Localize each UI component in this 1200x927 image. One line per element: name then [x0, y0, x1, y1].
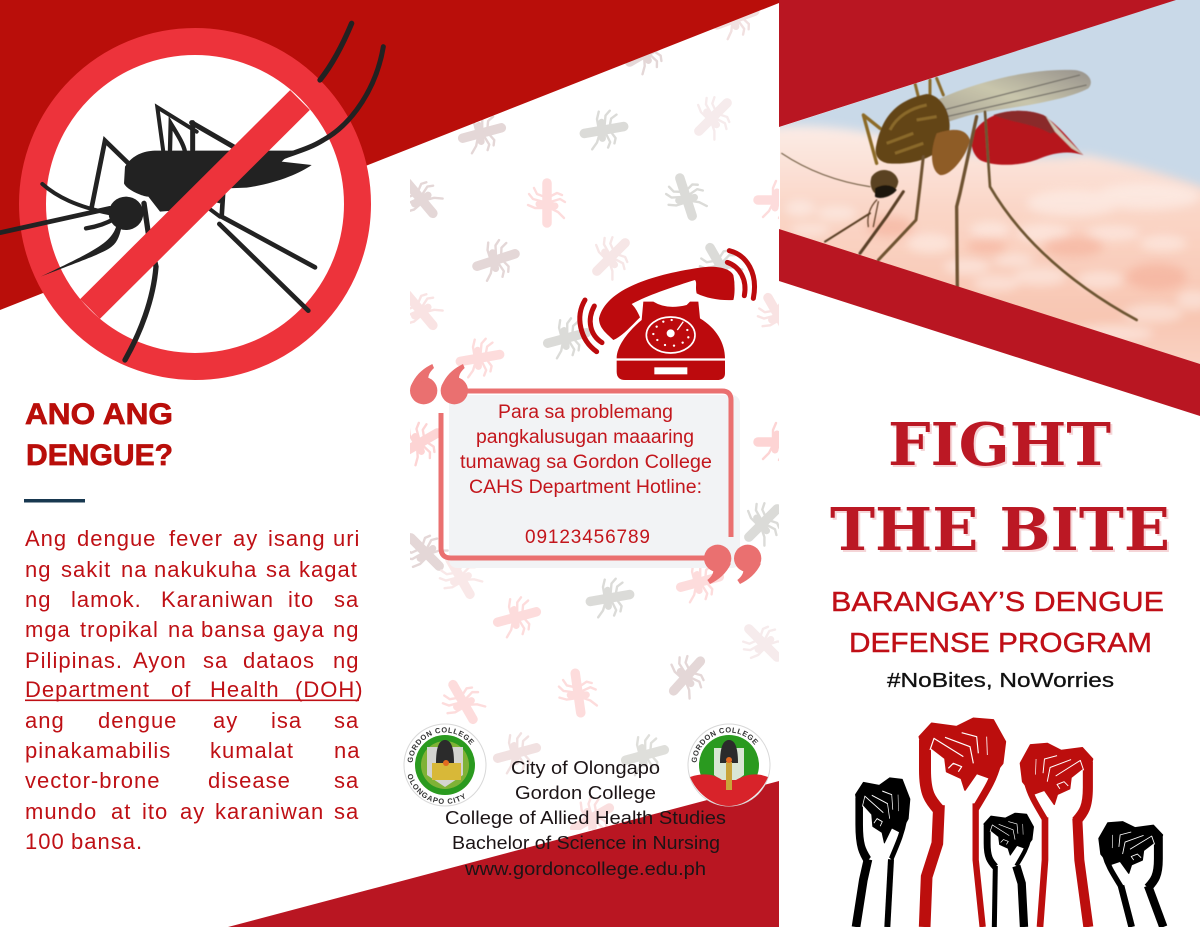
red banner: below photo	[779, 229, 1200, 416]
link underline	[25, 700, 359, 701]
icon: no-mosquito prohibition sign	[0, 23, 383, 367]
text block: dengue description: ay	[233, 526, 258, 551]
text block: dengue description: sa	[334, 768, 359, 793]
black fist 2	[984, 813, 1033, 927]
title: fight the bite: THE BITE	[832, 497, 1172, 566]
text block: dengue description: at	[111, 799, 131, 824]
logo: Gordon College seal: GORDON COLLEGE	[408, 727, 474, 762]
text block: dengue description: fever	[169, 526, 223, 551]
closing quotation mark	[704, 545, 761, 584]
text block: dengue description: disease	[208, 768, 291, 793]
text block: dengue description: ay	[213, 708, 238, 733]
hotline text: 09123456789	[525, 527, 650, 548]
text block: dengue description: isang	[268, 526, 326, 551]
title: fight the bite: FIGHT	[888, 410, 1111, 479]
text block: dengue description: sa	[334, 799, 359, 824]
text block: dengue description: mundo	[25, 799, 97, 824]
red fist 1	[919, 718, 1005, 927]
text block: dengue description: of	[171, 677, 191, 702]
text block: dengue description: uri	[333, 526, 360, 551]
text block: dengue description: ng	[25, 587, 51, 612]
text block: dengue description: ito	[142, 799, 168, 824]
opening quotation mark	[410, 364, 468, 404]
text block: dengue description: (DOH)	[295, 677, 364, 702]
text block: dengue description: tropikal	[80, 617, 159, 642]
text block: dengue description: sa	[266, 557, 291, 582]
text block: dengue description: lamok.	[71, 587, 142, 612]
text block: dengue description: ng	[333, 617, 359, 642]
hotline text: pangkalusugan maaaring	[476, 427, 694, 448]
text block: dengue description: karaniwan	[215, 799, 324, 824]
text block: dengue description: 100	[25, 829, 65, 854]
text block: dengue description: nakukuha	[154, 557, 257, 582]
hotline text	[460, 402, 712, 548]
text block: school address: Bachelor of Science in Nursing	[452, 832, 720, 853]
red fist 2	[1020, 743, 1093, 927]
subtitle: program name: BARANGAY’S DENGUE	[831, 586, 1164, 617]
icon: raised fists	[856, 718, 1163, 927]
logo: College of Allied Health Studies seal: GORDON COLLEGE	[692, 727, 758, 762]
heading: ano ang dengue	[25, 398, 173, 472]
text block: dengue description: na	[168, 617, 194, 642]
mosquito figure	[782, 70, 1137, 320]
text block: dengue description: isa	[271, 708, 302, 733]
text block: dengue description: sa	[334, 708, 359, 733]
text block: dengue description: dengue	[98, 708, 177, 733]
text block: dengue description: mga	[25, 617, 71, 642]
text block: dengue description: na	[121, 557, 147, 582]
text block: dengue description: bansa	[201, 617, 266, 642]
heading: ano ang dengue: ANO ANG	[25, 398, 173, 431]
red banner: top left	[0, 0, 779, 310]
text block: dengue description: ito	[288, 587, 314, 612]
logo: Gordon College seal	[404, 724, 486, 806]
text block: dengue description: sakit	[61, 557, 111, 582]
logo: Gordon College seal: OLONGAPO CITY	[408, 774, 465, 804]
panel: hotline callout	[410, 364, 761, 584]
text block: dengue description: vector-brone	[25, 768, 161, 793]
red banner: top right	[779, 0, 1176, 127]
text block: dengue description: sa	[203, 648, 228, 673]
photo: mosquito biting skin	[780, 0, 1200, 364]
logo: College of Allied Health Studies seal	[688, 724, 770, 806]
title: fight the bite	[830, 410, 1172, 566]
text block: dengue description: sa	[334, 587, 359, 612]
text block: dengue description: ng	[25, 557, 51, 582]
hashtag: #NoBites, NoWorries	[887, 670, 1114, 692]
text block: dengue description: bansa.	[71, 829, 143, 854]
text block: dengue description	[25, 526, 364, 854]
text block: dengue description: Pilipinas.	[25, 648, 123, 673]
black fist 1	[856, 778, 910, 927]
text block: school address: City of Olongapo	[511, 757, 660, 778]
text block: school address: College of Allied Health Studies	[445, 807, 726, 828]
text block: dengue description: kumalat	[210, 738, 294, 763]
text block: dengue description: pinakamabilis	[25, 738, 171, 763]
text block: dengue description: Department	[25, 677, 150, 702]
text block: dengue description: Ayon	[133, 648, 187, 673]
text block: dengue description: dengue	[77, 526, 156, 551]
text block: dengue description: ng	[333, 648, 359, 673]
heading: ano ang dengue: DENGUE?	[26, 439, 173, 472]
hotline text: Para sa problemang	[498, 402, 673, 423]
title: fight the bite: THE BITE	[830, 495, 1170, 564]
black fist 3	[1099, 822, 1163, 927]
text block: school address	[445, 757, 726, 879]
red banner: bottom centre	[228, 781, 779, 927]
text block: dengue description: ay	[180, 799, 205, 824]
text block: school address: Gordon College	[515, 782, 656, 803]
text block: dengue description: na	[334, 738, 360, 763]
heading underline rule	[24, 499, 85, 502]
hotline text: tumawag sa Gordon College	[460, 452, 712, 473]
icon: ringing telephone	[580, 251, 754, 380]
hotline text: CAHS Department Hotline:	[469, 477, 702, 498]
text block: dengue description: Ang	[25, 526, 67, 551]
text block: dengue description: gaya	[273, 617, 325, 642]
subtitle: program name	[831, 586, 1164, 658]
text block: dengue description: kagat	[299, 557, 358, 582]
text block: dengue description: ang	[25, 708, 65, 733]
title: fight the bite: FIGHT	[890, 412, 1113, 481]
text block: school address: www.gordoncollege.edu.ph	[464, 858, 706, 879]
callout border	[441, 391, 731, 558]
subtitle: program name: DEFENSE PROGRAM	[849, 627, 1152, 658]
text block: dengue description: dataos	[243, 648, 315, 673]
background mosquito pattern	[410, 10, 779, 830]
text block: dengue description: Health	[210, 677, 280, 702]
text block: dengue description: Karaniwan	[161, 587, 274, 612]
